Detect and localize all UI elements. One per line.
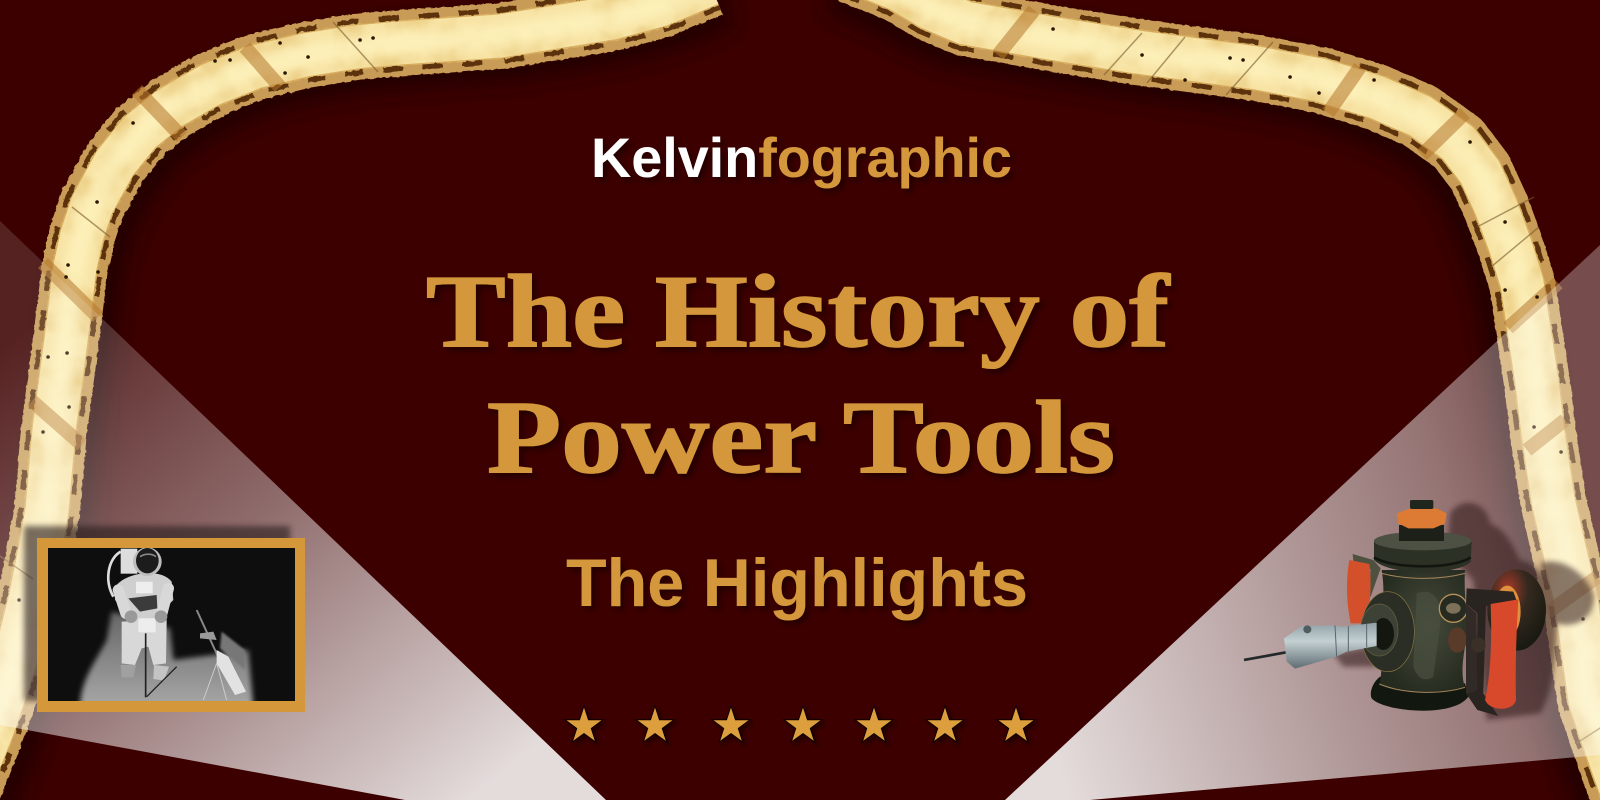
right handle grip xyxy=(1485,599,1518,709)
base xyxy=(1371,677,1468,711)
star rating row xyxy=(565,706,1035,742)
spotlight beam: left xyxy=(0,221,606,800)
film strip: left xyxy=(0,0,724,800)
chuck xyxy=(1284,623,1377,669)
right handle bracket xyxy=(1466,588,1517,716)
subtitle: The Highlights xyxy=(566,545,1028,621)
side knob xyxy=(1448,627,1467,653)
spotlight beam: right xyxy=(1005,245,1600,800)
left handle xyxy=(1353,554,1381,597)
film strip: right xyxy=(836,0,1600,800)
bit xyxy=(1244,651,1292,660)
tool on stand xyxy=(197,610,246,700)
title xyxy=(426,254,1171,495)
title: The History of xyxy=(426,254,1171,369)
flange xyxy=(1361,592,1414,672)
top nut xyxy=(1397,508,1447,528)
body xyxy=(1379,570,1466,693)
icon: antique electric drill xyxy=(1244,500,1594,720)
top cap xyxy=(1374,542,1472,572)
title: Power Tools xyxy=(487,380,1115,495)
lunar ground xyxy=(80,612,253,708)
drill shadow xyxy=(1333,503,1594,720)
brand heading: Kelvinfographic xyxy=(591,126,1012,189)
astronaut xyxy=(108,547,177,697)
photo: astronaut with power drill on the moon xyxy=(24,526,305,712)
wheel xyxy=(1487,569,1546,651)
name badge xyxy=(1439,594,1467,622)
